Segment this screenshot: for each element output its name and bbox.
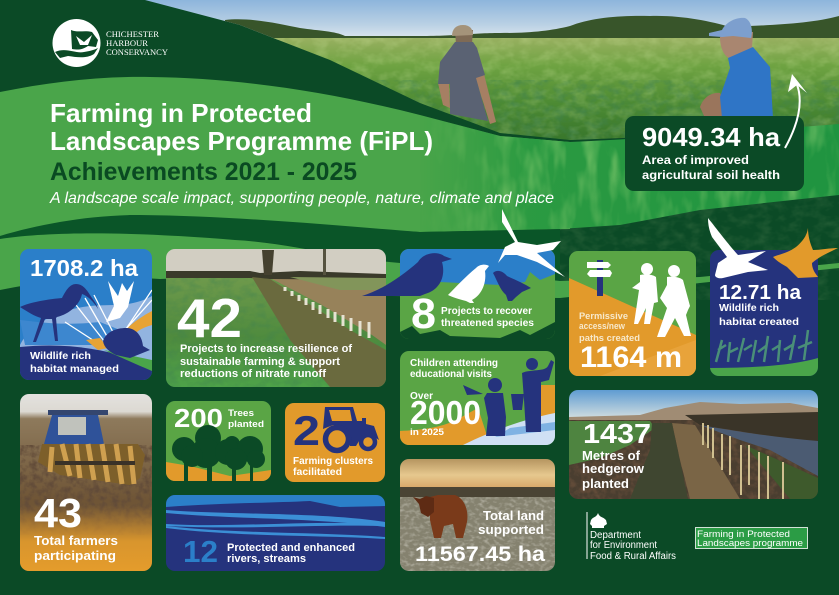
icon: white tern (498, 209, 565, 277)
panel: rivers: 12 (183, 534, 218, 569)
panel: 42 projects (166, 249, 386, 387)
panel: farming clusters: facilitated (293, 466, 342, 478)
icon: water vole (103, 328, 150, 358)
panel: 43 farmers: 43 (34, 490, 82, 536)
icon: children with bucket (463, 358, 554, 436)
icon: walkers (632, 263, 691, 337)
callout: soil health: 9049.34 ha (642, 122, 781, 152)
panel: total land supported (400, 459, 555, 571)
arrow (785, 74, 807, 148)
panel: educational visits: educational visits (410, 368, 492, 380)
icon: trees (172, 425, 265, 481)
leaf photo band (448, 124, 839, 230)
panel: trees planted: 200 (174, 403, 223, 433)
title: Landscapes Programme (FiPL) (50, 126, 433, 156)
logo: Chichester Harbour Conservancy: HARBOUR (106, 39, 149, 48)
logo: Defra: for Environment (590, 540, 657, 551)
logo: FiPL (696, 528, 808, 549)
panel: wildlife habitat created: habitat created (719, 316, 799, 328)
logo: FiPL: Farming in Protected (697, 529, 790, 540)
panel: 43 farmers: Total farmers (34, 533, 118, 548)
panel: trees planted: planted (228, 419, 264, 430)
panel: permissive paths: Permissive (579, 311, 628, 322)
dark leaf texture (560, 190, 839, 300)
panel: educational visits: Children attending (410, 357, 498, 369)
icon: tractor and plough (38, 410, 145, 485)
man in grey shirt (438, 25, 496, 124)
panel: hedgerow: planted (582, 476, 629, 491)
panel: farming clusters: Farming clusters (293, 455, 373, 467)
logo: Defra: Food & Rural Affairs (590, 551, 676, 562)
title (50, 98, 433, 156)
lower light green wave (0, 233, 839, 298)
panel: trees planted (166, 401, 271, 481)
panel: wildlife habitat created: 12.71 ha (719, 282, 802, 304)
icon: royal crest (590, 513, 607, 528)
panel: threatened species (362, 209, 565, 340)
panel: total land supported: Total land (483, 508, 544, 523)
icon: plants (716, 330, 812, 362)
panel: total land supported: supported (478, 522, 544, 537)
panel: 43 farmers: participating (34, 548, 116, 563)
panel: 42 projects: reductions of nitrate runoff (180, 368, 326, 380)
panel: educational visits: Over (410, 391, 433, 402)
panel: permissive paths: 1164 m (580, 341, 682, 374)
logo: Defra: Department (590, 530, 641, 541)
icon: tractor (323, 407, 379, 450)
logo: Chichester Harbour Conservancy: CHICHESTER (106, 30, 160, 39)
panel: trees planted: Trees (228, 408, 254, 419)
panel: farming clusters (285, 403, 385, 482)
panel: permissive paths: paths created (579, 333, 640, 344)
icon: signpost (587, 260, 612, 296)
icon: small dark bird (493, 271, 531, 301)
panel: hedgerow (569, 390, 818, 499)
panel: wildlife habitat managed: Wildlife rich (30, 350, 91, 362)
logo: FiPL: Landscapes programme (697, 538, 803, 549)
panel: rivers (166, 495, 385, 571)
dark ribbon under title (0, 215, 560, 285)
panel: 42 projects: 42 (177, 287, 242, 349)
callout: soil health (625, 116, 804, 191)
panel: total land supported: 11567.45 ha (415, 543, 545, 566)
panel: wildlife habitat managed: 1708.2 ha (30, 255, 138, 281)
panel: 42 projects: Projects to increase resilience of (180, 343, 352, 355)
panel: wildlife habitat created (708, 218, 838, 376)
panel: permissive paths (569, 251, 696, 376)
title: Farming in Protected (50, 98, 312, 128)
logo: Chichester Harbour Conservancy (52, 19, 168, 67)
panel: 42 projects: sustainable farming & support (180, 356, 340, 368)
panel: hedgerow: 1437 (583, 418, 651, 449)
panel: wildlife habitat managed (20, 249, 152, 380)
panel: educational visits: in 2025 (410, 427, 445, 438)
panel: 43 farmers (20, 394, 152, 571)
panel: threatened species: threatened species (441, 318, 534, 329)
tagline: A landscape scale impact, supporting people, nature, climate and place (49, 190, 554, 207)
logo: Defra (586, 512, 676, 562)
panel: hedgerow: hedgerow (582, 461, 645, 476)
icon: partridge (448, 265, 489, 303)
panel: rivers: rivers, streams (227, 553, 306, 565)
man in blue shirt and cap (700, 18, 773, 118)
light green title wave (0, 77, 570, 236)
icon: curlew (20, 284, 98, 342)
icon: highland cow (413, 495, 467, 538)
icon: orange bird (773, 228, 838, 278)
callout: soil health: Area of improved (642, 153, 749, 167)
panel: educational visits (400, 351, 555, 445)
panel: wildlife habitat created: Wildlife rich (719, 302, 779, 314)
subtitle: Achievements 2021 - 2025 (50, 158, 357, 186)
panel: permissive paths: access/new (579, 321, 626, 332)
panel: threatened species: Projects to recover (441, 306, 532, 317)
panel: hedgerow: Metres of (582, 448, 641, 463)
header photo: farmers in crop field (145, 0, 839, 148)
icon: dark songbird (362, 253, 452, 296)
callout: soil health: agricultural soil health (642, 168, 780, 182)
panel: wildlife habitat managed: habitat managed (30, 363, 119, 375)
icon: reeds (65, 281, 152, 350)
panel: threatened species: 8 (411, 290, 436, 338)
hedge tree guards (285, 287, 369, 338)
icon: white goose (708, 218, 768, 278)
panel: farming clusters: 2 (293, 407, 320, 454)
panel: educational visits: 2000 (410, 394, 481, 431)
logo: Chichester Harbour Conservancy: CONSERVANCY (106, 48, 168, 57)
panel: rivers: Protected and enhanced (227, 542, 355, 554)
